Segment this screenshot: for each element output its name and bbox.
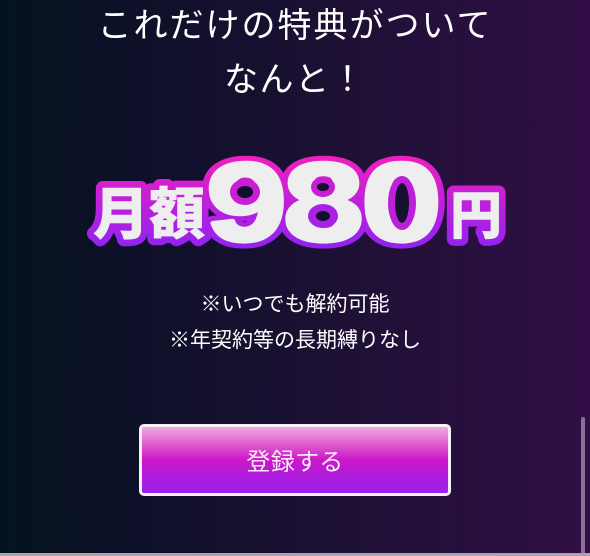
white fill layer: 月額	[93, 183, 205, 246]
white fill layer: 0	[362, 140, 441, 263]
note: no annual contract: ※年契約等の長期縛りなし	[169, 329, 421, 352]
button: register	[139, 424, 451, 496]
digit counters	[230, 176, 416, 230]
outline layer: 0	[362, 140, 441, 263]
white fill layer	[93, 140, 502, 263]
white fill layer: 円	[450, 188, 502, 246]
outline layer	[93, 140, 502, 263]
outline layer: 月額	[93, 183, 205, 246]
outline layer: 円	[450, 188, 502, 246]
outline layer: 9	[207, 140, 286, 263]
button: register: 登録する	[246, 449, 344, 476]
white fill layer: 9	[207, 140, 286, 263]
note: cancel anytime: ※いつでも解約可能	[200, 293, 390, 316]
bottom edge line	[0, 553, 590, 556]
outline layer: 8	[284, 140, 363, 263]
heading: first line: これだけの特典がついて	[98, 7, 492, 45]
scrollbar	[581, 417, 585, 556]
heading: second line: なんと！	[224, 61, 366, 99]
white fill layer: 8	[284, 140, 363, 263]
